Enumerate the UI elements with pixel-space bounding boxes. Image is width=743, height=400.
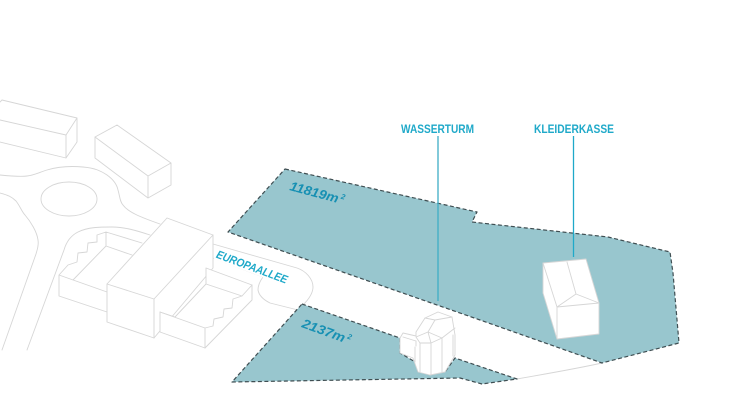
building: central complex — [59, 218, 252, 348]
road network — [0, 166, 602, 379]
callout: Wasserturm: WASSERTURM — [401, 124, 474, 136]
building: north-west block — [0, 100, 77, 158]
label: area 2137 m2: 2137m — [299, 315, 348, 345]
plot: 2137 m2 — [232, 304, 517, 384]
building: Kleiderkasse — [543, 259, 599, 339]
label: area 2137 m2: 2 — [345, 331, 354, 342]
label: area 11819 m2: 2 — [339, 192, 347, 202]
label: area 2137 m2 — [299, 315, 354, 348]
building: roundabout block — [95, 125, 171, 198]
plot: 11819 m2 — [228, 169, 679, 363]
label: Europaallee: EUROPAALLEE — [214, 249, 289, 287]
callout: Kleiderkasse — [534, 124, 614, 257]
callout: Kleiderkasse: KLEIDERKASSE — [534, 124, 614, 136]
building: Wasserturm — [400, 312, 455, 375]
label: area 11819 m2: 11819m — [288, 178, 341, 206]
